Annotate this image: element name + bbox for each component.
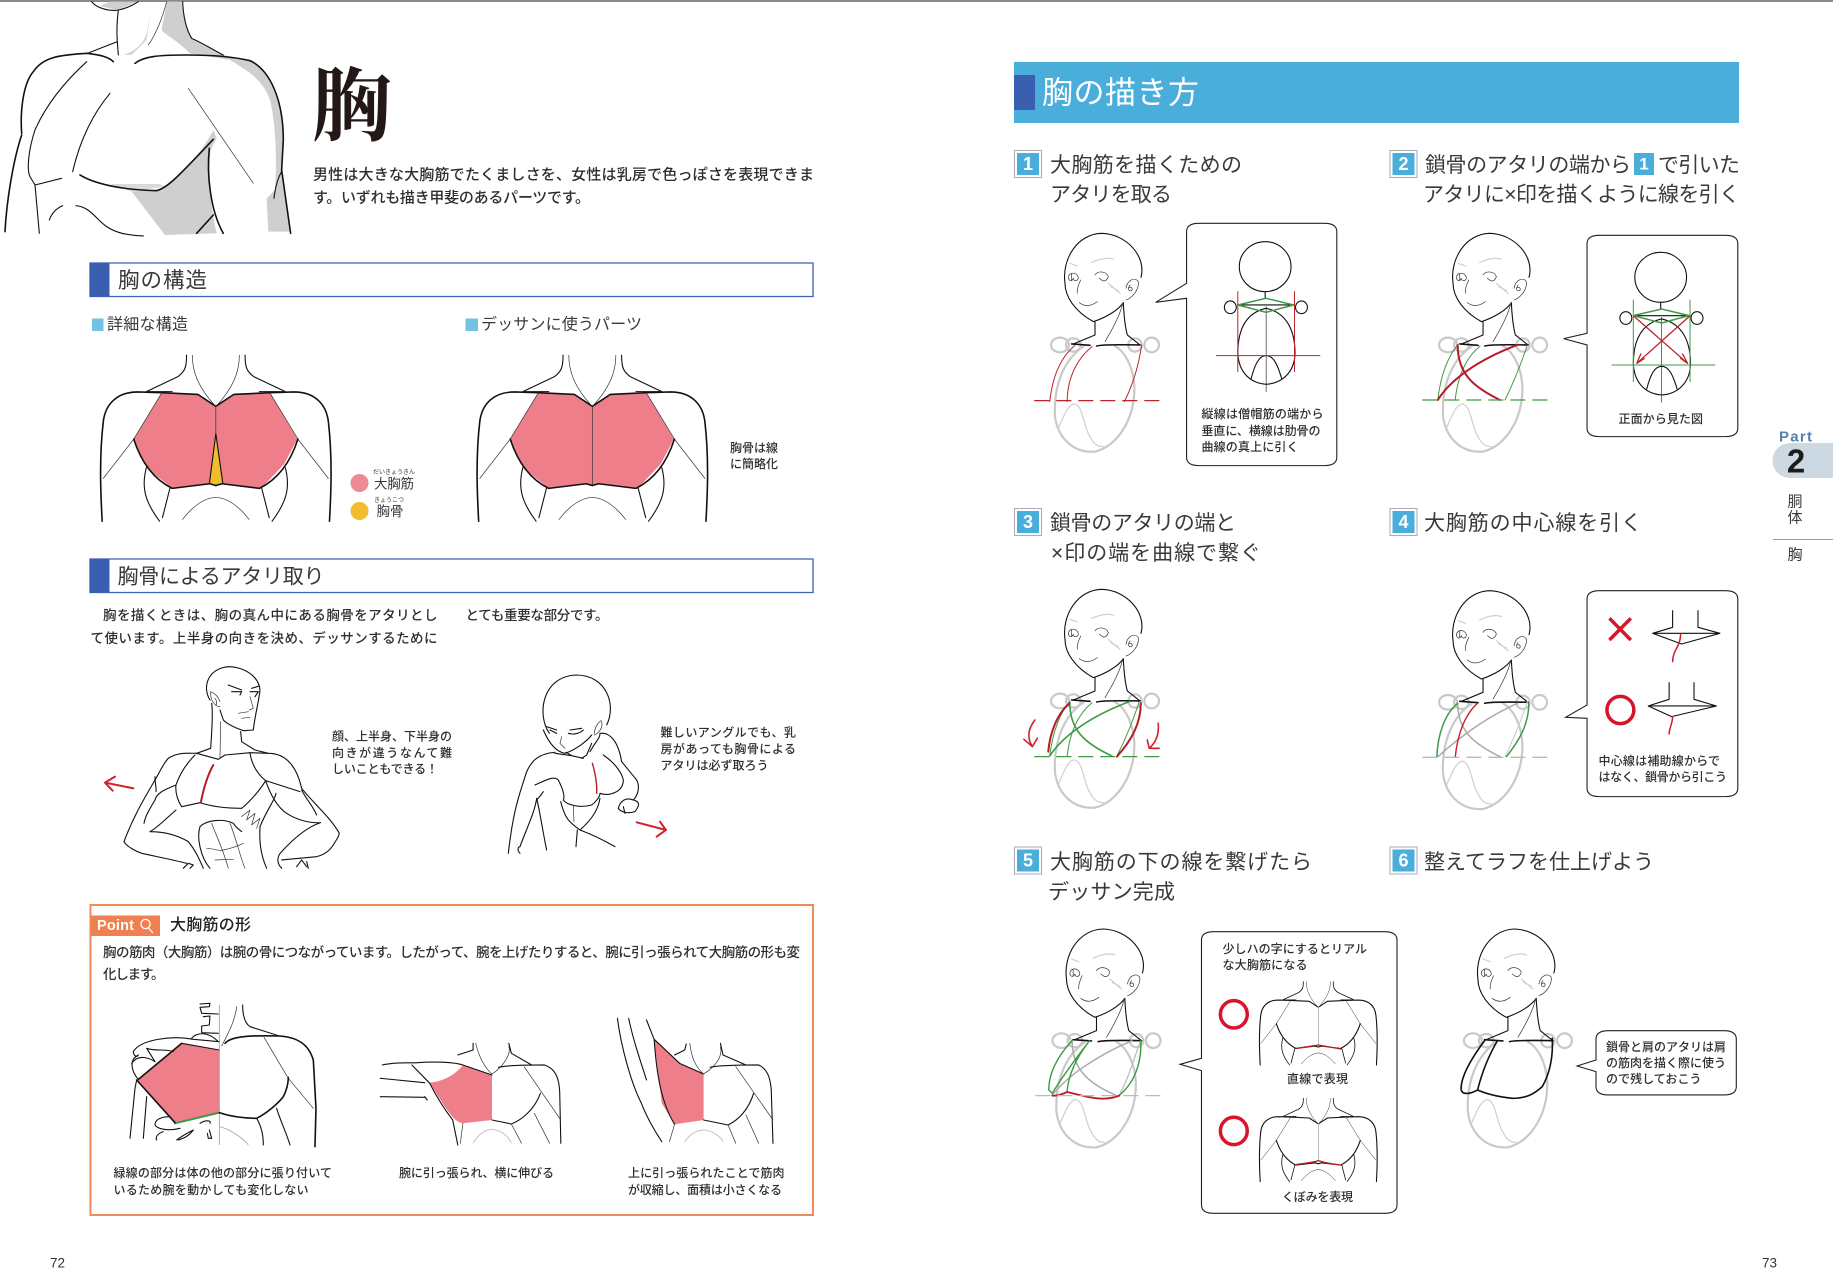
badge 1 — [1014, 150, 1042, 178]
section header: 胸骨によるアタリ取り: 胸骨によるアタリ取り — [118, 566, 324, 588]
caption: male figure: しいこともできる！ — [332, 762, 438, 776]
diagram: chest with arm out — [380, 1043, 561, 1145]
badge 3 — [1014, 508, 1042, 536]
badge 3: 3 — [1023, 512, 1033, 532]
captions: いるため腕を動かしても変化しない — [114, 1182, 308, 1197]
callout: front view guides — [1156, 223, 1337, 466]
top page edge line — [0, 0, 1833, 2]
note: sternum simplified: 胸骨は線 — [730, 440, 778, 455]
heading — [1050, 154, 1242, 206]
legend: muscle and bone: 大胸筋 — [374, 476, 414, 492]
text: Point description: 胸の筋肉（大胸筋）は腕の骨につながっています。したがって、腕を上げたりすると、腕に引っ張られて大胸筋の形も変 — [103, 944, 800, 960]
body text: て使います。上半身の向きを決め、デッサンするために — [90, 630, 438, 646]
tag: Point: Point — [97, 918, 134, 934]
callout: lower line variations: 少しハの字にするとリアル — [1222, 941, 1367, 956]
heading: 大胸筋の下の線を繋げたら — [1050, 851, 1312, 874]
callout: front view guides: 垂直に、横線は肋骨の — [1202, 423, 1320, 438]
badge 5 — [1014, 847, 1042, 874]
legend: muscle and bone — [350, 469, 415, 520]
heading: 大胸筋の形: 大胸筋の形 — [170, 916, 251, 934]
side tab: Part 2: 胸 — [1787, 546, 1803, 564]
page title: 胸 — [312, 64, 392, 152]
callout: front view guides: 縦線は僧帽筋の端から — [1202, 406, 1324, 421]
arrow: right red — [637, 822, 666, 837]
callout: center line correct and wrong: はなく、鎖骨から引こう — [1598, 769, 1727, 784]
badge 6: 6 — [1398, 850, 1409, 870]
heading — [1048, 851, 1312, 904]
caption: female figure — [660, 724, 796, 772]
caption: female figure: 難しいアングルでも、乳 — [660, 724, 796, 740]
captions — [114, 1165, 784, 1197]
body text: 胸を描くときは、胸の真ん中にある胸骨をアタリとし — [103, 607, 438, 623]
figure with curves and arrows — [1024, 589, 1162, 808]
heading — [1423, 153, 1740, 206]
figure with red guides — [1035, 233, 1162, 452]
heading: アタリに×印を描くように線を引く — [1423, 184, 1740, 206]
badge 4: 4 — [1398, 512, 1409, 532]
step 6 — [1390, 847, 1736, 1147]
heading: 1 — [1639, 154, 1649, 174]
side tab: Part 2: Part — [1779, 428, 1812, 446]
caption: male figure — [332, 728, 452, 776]
badge 2: 2 — [1398, 154, 1409, 174]
heading: アタリを取る — [1050, 184, 1172, 206]
callout: keep guide marks: 鎖骨と肩のアタリは肩 — [1606, 1039, 1726, 1054]
captions: 上に引っ張られたことで筋肉 — [628, 1165, 784, 1180]
tag: Point — [90, 916, 160, 936]
heading: 整えてラフを仕上げよう — [1424, 851, 1654, 874]
legend: muscle and bone: きょうこつ — [374, 497, 404, 504]
callout: center line correct and wrong: 中心線は補助線からで — [1598, 753, 1720, 768]
text: Point description: 化します。 — [103, 967, 164, 982]
subheading: デッサンに使うパーツ: デッサンに使うパーツ — [481, 314, 642, 334]
callout: keep guide marks: の筋肉を描く際に使う — [1606, 1055, 1726, 1070]
callout: center line correct and wrong — [1566, 591, 1738, 797]
diagram: chest with arm raised — [617, 1018, 773, 1143]
badge 1: 1 — [1023, 154, 1033, 174]
heading: 鎖骨のアタリの端から — [1425, 154, 1631, 177]
text: Point description — [103, 944, 800, 982]
callout: keep guide marks: ので残しておこう — [1606, 1071, 1702, 1086]
callout: lower line variations: くぼみを表現 — [1282, 1189, 1353, 1204]
right header: 胸の描き方: 胸の描き方 — [1042, 76, 1199, 110]
section header: 胸の構造 — [90, 262, 813, 297]
captions: 緑線の部分は体の他の部分に張り付いて — [114, 1165, 332, 1180]
section header: 胸骨によるアタリ取り — [90, 558, 813, 593]
panel: Point 大胸筋の形 — [90, 905, 813, 1215]
legend: muscle and bone: 胸骨 — [376, 504, 404, 519]
heading: で引いた — [1658, 154, 1740, 177]
figure with lower chest line — [1036, 929, 1162, 1147]
illustration: female figure — [508, 675, 639, 853]
legend: muscle and bone: だいきょうきん — [373, 469, 415, 476]
step 3 — [1014, 508, 1261, 808]
figure with center line — [1423, 591, 1550, 809]
step 2 — [1390, 150, 1740, 452]
step 1 — [1014, 150, 1337, 466]
intro text: す。いずれも描き甲斐のあるパーツです。 — [313, 188, 590, 206]
heading: 大胸筋を描くための — [1050, 154, 1242, 177]
note: sternum simplified — [730, 440, 778, 471]
caption: male figure: 向きが違うなんて難 — [332, 745, 452, 760]
step 5 — [1014, 847, 1397, 1213]
badge 5: 5 — [1023, 850, 1033, 870]
right header: 胸の描き方 — [1014, 62, 1739, 123]
caption: female figure: アタリは必ず取ろう — [660, 758, 768, 772]
callout: lower line variations: 直線で表現 — [1287, 1071, 1348, 1086]
callout: keep guide marks — [1577, 1031, 1736, 1095]
heading: 鎖骨のアタリの端と — [1050, 512, 1236, 535]
body text: とても重要な部分です。 — [466, 608, 608, 623]
captions: 腕に引っ張られ、横に伸びる — [399, 1165, 554, 1180]
side tab: Part 2: 2 — [1787, 442, 1805, 480]
page number 72: 72 — [50, 1256, 65, 1270]
diagram: detailed chest structure — [101, 355, 331, 521]
figure: finished rough — [1461, 929, 1572, 1147]
intro text: 男性は大きな大胸筋でたくましさを、女性は乳房で色っぽさを表現できま — [313, 166, 814, 184]
side tab: Part 2: 体 — [1787, 510, 1803, 526]
caption: male figure: 顔、上半身、下半身の — [332, 728, 452, 744]
badge 2 — [1390, 150, 1417, 178]
intro text — [313, 166, 814, 206]
heading — [1050, 512, 1261, 565]
callout: lower line variations: な大胸筋になる — [1222, 957, 1308, 972]
step 4 — [1390, 508, 1738, 809]
illustration: muscular male figure — [124, 667, 339, 868]
callout: seen from front — [1564, 235, 1738, 437]
side tab: Part 2 — [1772, 428, 1833, 564]
callout: lower line variations — [1180, 932, 1397, 1213]
badge 6 — [1390, 847, 1417, 874]
body text — [90, 607, 608, 646]
page number 73: 73 — [1762, 1256, 1777, 1270]
heading: ×印の端を曲線で繋ぐ — [1051, 542, 1261, 565]
arrow: left red — [105, 777, 133, 791]
illustration: male chest opener — [5, 2, 291, 236]
badge 4 — [1390, 508, 1417, 536]
subheading: 詳細な構造: 詳細な構造 — [107, 316, 188, 334]
diagram: chest at rest with bones — [130, 1003, 316, 1147]
note: sternum simplified: に簡略化 — [730, 456, 778, 471]
figure with X guides — [1423, 233, 1550, 452]
callout: seen from front: 正面から見た図 — [1618, 412, 1703, 426]
heading: デッサン完成 — [1048, 881, 1175, 904]
diagram: simplified chest for drawing — [477, 355, 708, 521]
callout: front view guides: 曲線の真上に引く — [1202, 439, 1298, 454]
heading: 大胸筋の中心線を引く — [1424, 512, 1642, 535]
caption: female figure: 房があっても胸骨による — [660, 741, 796, 756]
side tab: Part 2: 胴 — [1787, 494, 1803, 510]
section header: 胸の構造: 胸の構造 — [118, 268, 207, 292]
captions: が収縮し、面積は小さくなる — [628, 1182, 782, 1197]
